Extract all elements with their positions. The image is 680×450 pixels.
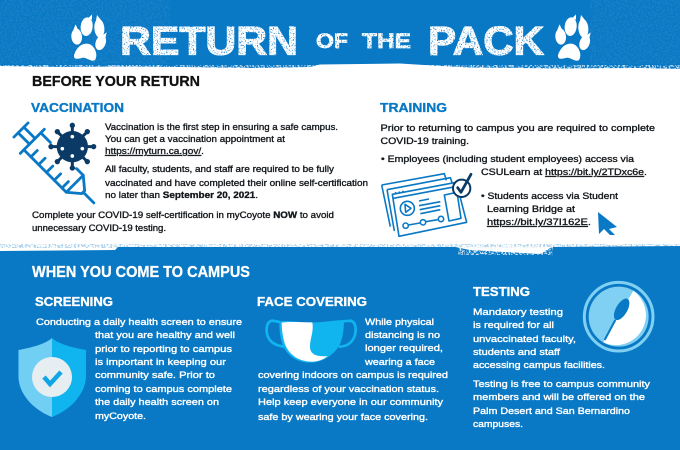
vaccination body text: Vaccination is the first step in ensuring a safe campus. — [105, 121, 338, 132]
face covering body text: wearing a face — [364, 356, 435, 367]
face covering body text: covering indoors on campus is required — [258, 369, 448, 380]
title: OF — [316, 30, 348, 53]
screening body text: myCoyote. — [95, 410, 146, 421]
icon: syringe — [9, 118, 106, 215]
face covering body text — [258, 316, 448, 422]
screening body text: Conducting a daily health screen to ensure — [36, 316, 242, 327]
screening body text — [36, 316, 242, 421]
training body text: Learning Bridge at — [487, 203, 575, 214]
face covering heading: FACE COVERING — [257, 294, 367, 309]
icon: face mask — [267, 320, 356, 363]
vaccination body text: You can get a vaccination appointment at — [105, 133, 285, 144]
screening heading: SCREENING — [35, 294, 113, 309]
testing body text: Palm Desert and San Bernardino — [473, 405, 630, 416]
testing body text — [473, 306, 650, 429]
training body text: CSULearn at https://bit.ly/2TDxc6e . — [481, 166, 647, 177]
screening body text: prior to reporting to campus — [95, 343, 232, 354]
icon: check badge — [453, 174, 471, 197]
title: PACK — [428, 20, 544, 64]
screening body text: coming to campus complete — [95, 383, 232, 394]
title: RETURN — [120, 20, 298, 64]
panel: testing — [473, 282, 653, 429]
screening body text: that you are healthy and well — [95, 329, 235, 340]
vaccination body text: vaccinated and have completed their online self-certification — [105, 177, 368, 188]
bottom blue section — [0, 244, 680, 450]
title — [120, 20, 544, 64]
testing body text: campuses. — [473, 418, 523, 429]
icon: shield — [18, 338, 86, 417]
icon: right paw print — [555, 14, 592, 61]
testing body text: accessing campus facilities. — [473, 359, 605, 370]
icon: cursor arrow — [598, 212, 617, 235]
training body text: • Employees (including student employees) access via — [381, 153, 635, 164]
icon: test swab — [584, 282, 653, 351]
testing body text: students and staff — [473, 346, 560, 357]
training body text: Prior to returning to campus you are required to complete — [380, 122, 655, 133]
face covering body text: distancing is no — [365, 329, 440, 340]
vaccination body text: unnecessary COVID-19 testing. — [32, 222, 166, 233]
screening body text: is important in keeping our — [95, 356, 226, 367]
title: THE — [362, 30, 411, 53]
panel: face covering — [257, 294, 448, 422]
vaccination body text: All faculty, students, and staff are required to be fully — [105, 163, 334, 174]
training body text — [380, 122, 655, 227]
testing body text: is required for all — [473, 319, 554, 330]
testing body text: Testing is free to campus community — [473, 378, 650, 389]
vaccination body text: no later than September 20, 2021 . — [105, 189, 258, 200]
training body text: COVID-19 training. — [380, 135, 469, 146]
top blue banner — [0, 0, 680, 69]
face covering body text: Help keep everyone in our community — [258, 396, 443, 407]
face covering body text: longer required, — [365, 342, 443, 353]
screening body text: community safe. Prior to — [95, 369, 215, 380]
face covering body text: safe by wearing your face covering. — [258, 411, 428, 422]
icon: left paw print — [71, 14, 108, 61]
testing heading: TESTING — [473, 284, 530, 299]
face covering body text: regardless of your vaccination status. — [258, 383, 439, 394]
icon: training windows — [382, 174, 467, 236]
testing body text: Mandatory testing — [473, 306, 563, 317]
training heading: TRAINING — [380, 100, 447, 115]
panel: vaccination — [9, 100, 368, 233]
heading: when you come to campus: WHEN YOU COME TO CAMPUS — [32, 264, 250, 281]
training body text: • Students access via Student — [481, 190, 618, 201]
vaccination body text — [32, 121, 368, 233]
vaccination body text: Complete your COVID-19 self-certification in myCoyote NOW to avoid — [32, 209, 334, 220]
testing body text: unvaccinated faculty, — [473, 333, 576, 344]
screening body text: the daily health screen on — [95, 396, 219, 407]
vaccination heading: VACCINATION — [31, 100, 124, 115]
vaccination body text: https://myturn.ca.gov/ . — [105, 145, 204, 156]
icon: virus — [48, 123, 96, 171]
panel: screening — [18, 294, 242, 421]
heading: before your return: BEFORE YOUR RETURN — [32, 73, 200, 90]
face covering body text: While physical — [365, 316, 434, 327]
testing body text: members and will be offered on the — [473, 391, 645, 402]
panel: training — [380, 100, 655, 236]
training body text: https://bit.ly/37I162E . — [487, 216, 591, 227]
